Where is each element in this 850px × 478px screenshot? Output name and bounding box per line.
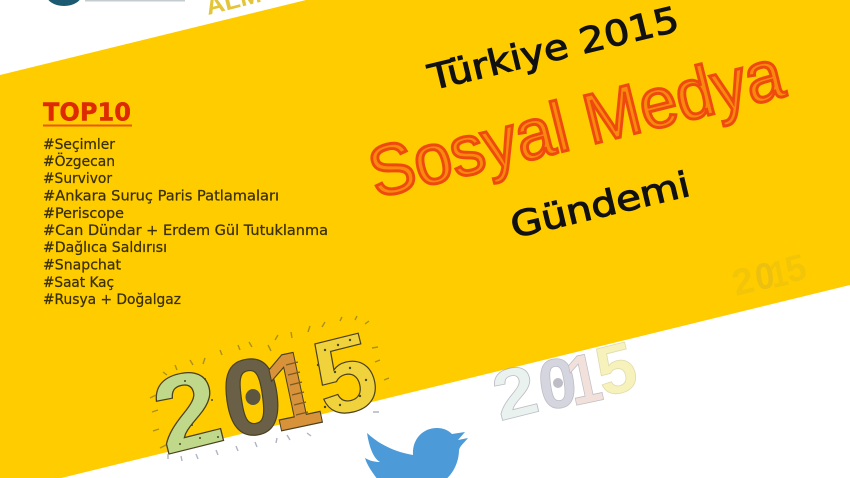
illustration: large 2015 doodle: 2 (141, 344, 234, 477)
illustration: pale 2015 doodle: 1 (560, 338, 608, 421)
icon: Twitter bird (365, 428, 468, 478)
title: Türkiye 2015: Türkiye 2015 (424, 0, 683, 99)
doodle ticks (150, 316, 389, 448)
illustration: large 2015 doodle: 5 (301, 308, 389, 440)
list: top 10 hashtags: #Seçimler (43, 137, 115, 153)
illustration: large 2015 doodle: 1 (256, 326, 330, 454)
illustration: pale 2015 doodle: 2 (485, 349, 545, 436)
faint 2015 on yellow (728, 246, 810, 304)
list: top 10 hashtags: #Can Dündar + Erdem Gül Tutuklanma (43, 223, 328, 239)
list: top 10 hashtags: #Periscope (43, 206, 124, 222)
faint 2015 on yellow: 0 (752, 255, 777, 298)
illustration: large 2015 doodle: 0 (214, 333, 290, 461)
illustration: pale 2015 doodle: 5 (588, 326, 644, 412)
heading: TOP10: TOP10 (43, 98, 131, 126)
faint 2015 on yellow: 1 (766, 252, 791, 296)
title: Gündemi: Gündemi (507, 165, 694, 247)
list: top 10 hashtags: #Snapchat (43, 258, 121, 274)
title: Sosyal Medya: Sosyal Medya (361, 34, 792, 214)
list: top 10 hashtags: #Dağlıca Saldırısı (43, 240, 167, 256)
list: top 10 hashtags: #Özgecan (43, 152, 115, 170)
faint 2015 on yellow: 5 (781, 246, 810, 291)
list: top 10 hashtags: #Rusya + Doğalgaz (43, 292, 181, 308)
faint 2015 on yellow: 2 (728, 259, 758, 304)
illustration: pale 2015 doodle: 0 (533, 342, 582, 425)
illustration: pale 2015 doodle (485, 326, 644, 436)
list: top 10 hashtags (43, 137, 328, 308)
list: top 10 hashtags: #Survivor (43, 171, 112, 187)
logo: cropped mark and wordmark (46, 0, 185, 6)
list: top 10 hashtags: #Saat Kaç (43, 275, 114, 291)
list: top 10 hashtags: #Ankara Suruç Paris Patlamaları (43, 188, 279, 204)
zero centre (246, 389, 260, 405)
illustration: large 2015 doodle (141, 308, 389, 477)
digit texture (179, 339, 367, 445)
